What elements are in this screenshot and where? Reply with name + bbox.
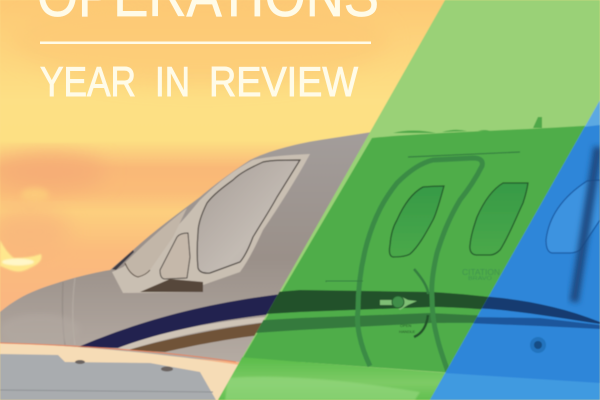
title divider	[40, 42, 371, 44]
subtitle: year in review	[40, 58, 358, 105]
green band: lower wing	[218, 357, 446, 400]
blue band: cabin window	[546, 180, 600, 253]
green band: dorsal fin and antennas	[393, 117, 542, 133]
blue band: foreground wiper	[574, 147, 598, 302]
sun glow	[0, 240, 42, 272]
navy and brown cheat lines	[78, 292, 300, 352]
foreground wing	[0, 343, 240, 400]
subtitle: year in review: YEAR	[40, 58, 136, 105]
blue band: fuselage	[446, 124, 600, 384]
green band: fuselage	[243, 125, 586, 373]
green band: cabin windows	[389, 183, 528, 257]
blue band: round port	[530, 337, 546, 353]
green band: small labels	[399, 268, 500, 334]
green band: small labels: CITATION	[462, 268, 500, 277]
blue band: cheat lines	[470, 296, 600, 324]
aircraft fuselage	[0, 132, 372, 362]
blue band: lower wing	[420, 372, 600, 400]
subtitle: year in review: IN	[155, 58, 190, 105]
green band: cheat lines	[266, 290, 488, 314]
subtitle: year in review: REVIEW	[209, 58, 358, 105]
green band: small labels: OPEN	[400, 323, 411, 328]
green band: small labels: HANDLE	[399, 329, 416, 334]
blue diagonal band	[429, 100, 600, 400]
green band: door handle	[326, 269, 428, 337]
green band: upper door line	[408, 152, 520, 157]
cockpit windshield frame and windows	[112, 154, 310, 293]
green band: door seam	[358, 158, 482, 372]
green band: small labels: BRAVO	[468, 276, 492, 282]
green diagonal band	[218, 0, 600, 400]
